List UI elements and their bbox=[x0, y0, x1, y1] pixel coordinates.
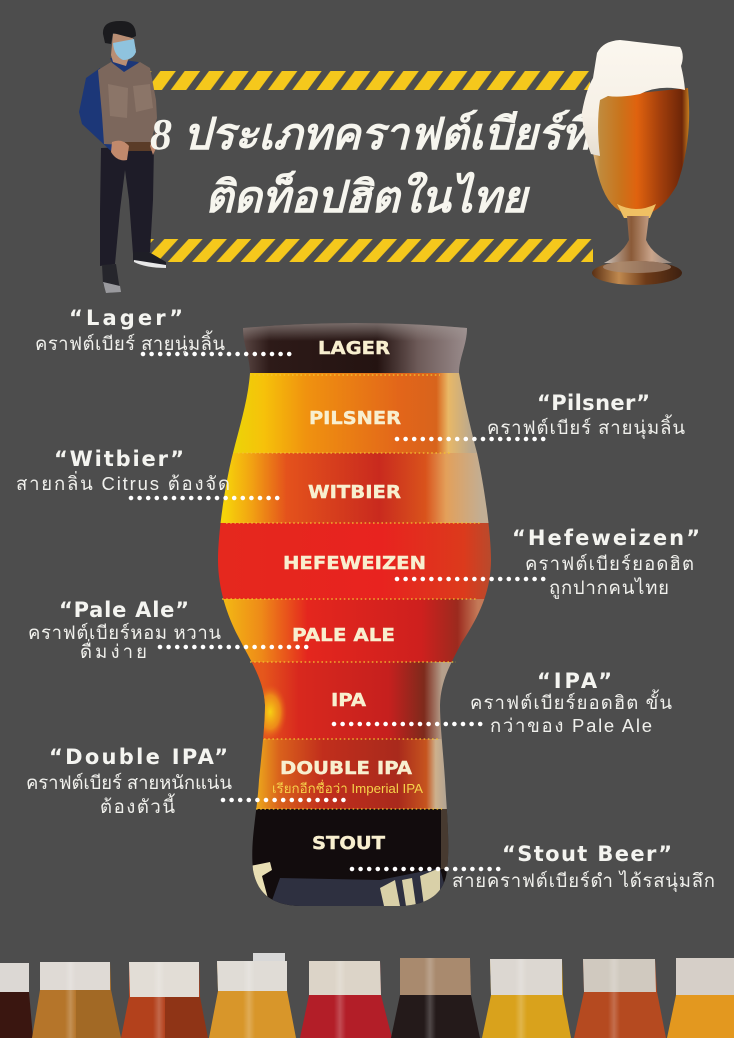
callout: ipa: “IPA” bbox=[537, 669, 612, 693]
title: ติดท็อปฮิตในไทย bbox=[205, 170, 531, 222]
band: witbier bbox=[215, 453, 495, 523]
label: PALE ALE: PALE ALE bbox=[292, 626, 395, 646]
label: IPA: IPA bbox=[331, 691, 367, 711]
band: ipa bbox=[240, 662, 460, 739]
leader line: ipa bbox=[334, 722, 486, 726]
leader line: pale ale bbox=[160, 645, 313, 649]
leader line: witbier bbox=[131, 496, 284, 500]
label: PILSNER: PILSNER bbox=[309, 409, 402, 429]
beer glass diagram bbox=[215, 315, 495, 909]
label: Imperial IPA note: เรียกอีกชื่อว่า Imperial IPA bbox=[272, 780, 423, 796]
callout: ipa: กว่าของ Pale Ale bbox=[490, 715, 652, 736]
callout: pale ale: คราฟต์เบียร์หอม หวาน bbox=[28, 622, 221, 643]
label: STOUT: STOUT bbox=[312, 834, 385, 854]
leader line: pilsner bbox=[397, 437, 549, 441]
header hazard stripe bottom bbox=[150, 239, 593, 262]
band: double ipa bbox=[256, 739, 447, 809]
glass 2 bbox=[32, 962, 121, 1038]
callout: double ipa: ต้องตัวนี้ bbox=[100, 793, 175, 817]
callout: hefeweizen: คราฟต์เบียร์ยอดฮิต bbox=[525, 553, 694, 574]
title: 8 ประเภทคราฟต์เบียร์ที่ bbox=[150, 103, 599, 159]
title bbox=[150, 103, 599, 222]
leader line: double ipa bbox=[223, 798, 348, 802]
callout: stout beer bbox=[452, 842, 715, 893]
callout: stout beer: สายคราฟต์เบียร์ดำ ได้รสนุ่มลึก bbox=[452, 870, 715, 893]
leader line: lager bbox=[143, 352, 294, 356]
band: pilsner bbox=[233, 373, 477, 453]
glass 1 bbox=[0, 963, 33, 1038]
callout: hefeweizen bbox=[512, 526, 700, 599]
glass 3 bbox=[121, 962, 208, 1038]
glass 5 bbox=[300, 961, 392, 1038]
callout: pale ale bbox=[28, 598, 221, 662]
label: LAGER: LAGER bbox=[318, 339, 391, 359]
callout: double ipa: “Double IPA” bbox=[49, 745, 228, 769]
glass 9 bbox=[667, 958, 734, 1038]
band: stout bbox=[252, 809, 448, 906]
callout: witbier bbox=[16, 447, 230, 494]
label: DOUBLE IPA: DOUBLE IPA bbox=[280, 759, 412, 779]
callout: lager bbox=[35, 306, 225, 356]
leader line: hefeweizen bbox=[397, 577, 548, 581]
glass 7 bbox=[482, 959, 571, 1038]
callout: ipa: คราฟต์เบียร์ยอดฮิต ขั้น bbox=[470, 689, 672, 713]
band: lager bbox=[244, 323, 467, 373]
callout: ipa bbox=[470, 669, 672, 736]
glass bands bbox=[215, 315, 495, 909]
callout: pilsner: คราฟต์เบียร์ สายนุ่มลิ้น bbox=[487, 414, 685, 440]
callout: hefeweizen: ถูกปากคนไทย bbox=[549, 577, 669, 599]
callout: stout beer: “Stout Beer” bbox=[502, 842, 672, 866]
band: pale ale bbox=[215, 599, 495, 662]
label: HEFEWEIZEN: HEFEWEIZEN bbox=[283, 554, 426, 574]
leader line: stout bbox=[352, 867, 504, 871]
illustration: man with mask bbox=[79, 21, 166, 293]
callout: witbier: “Witbier” bbox=[54, 447, 184, 471]
glass 6 bbox=[391, 958, 480, 1038]
band: hefeweizen bbox=[215, 523, 495, 599]
header hazard stripe top bbox=[150, 71, 590, 90]
callout: pale ale: “Pale Ale” bbox=[59, 598, 189, 622]
callout: pale ale: ดื่มง่าย bbox=[80, 639, 147, 662]
row of beer glasses bbox=[0, 953, 734, 1038]
glass 8 bbox=[574, 959, 666, 1038]
callout: lager: “Lager” bbox=[69, 306, 183, 330]
callout: double ipa: คราฟต์เบียร์ สายหนักแน่น bbox=[26, 772, 232, 793]
callout: hefeweizen: “Hefeweizen” bbox=[512, 526, 700, 550]
callout: witbier: สายกลิ่น Citrus ต้องจัด bbox=[16, 471, 230, 494]
callout: double ipa bbox=[26, 745, 232, 817]
label: WITBIER: WITBIER bbox=[308, 483, 402, 503]
glass 4 bbox=[209, 953, 296, 1038]
callout: lager: คราฟต์เบียร์ สายนุ่มลิ้น bbox=[35, 330, 225, 356]
callout: pilsner: “Pilsner” bbox=[537, 391, 650, 415]
band separators bbox=[222, 375, 482, 809]
callout: pilsner bbox=[487, 391, 685, 440]
illustration: beer glass with foam bbox=[582, 40, 689, 285]
